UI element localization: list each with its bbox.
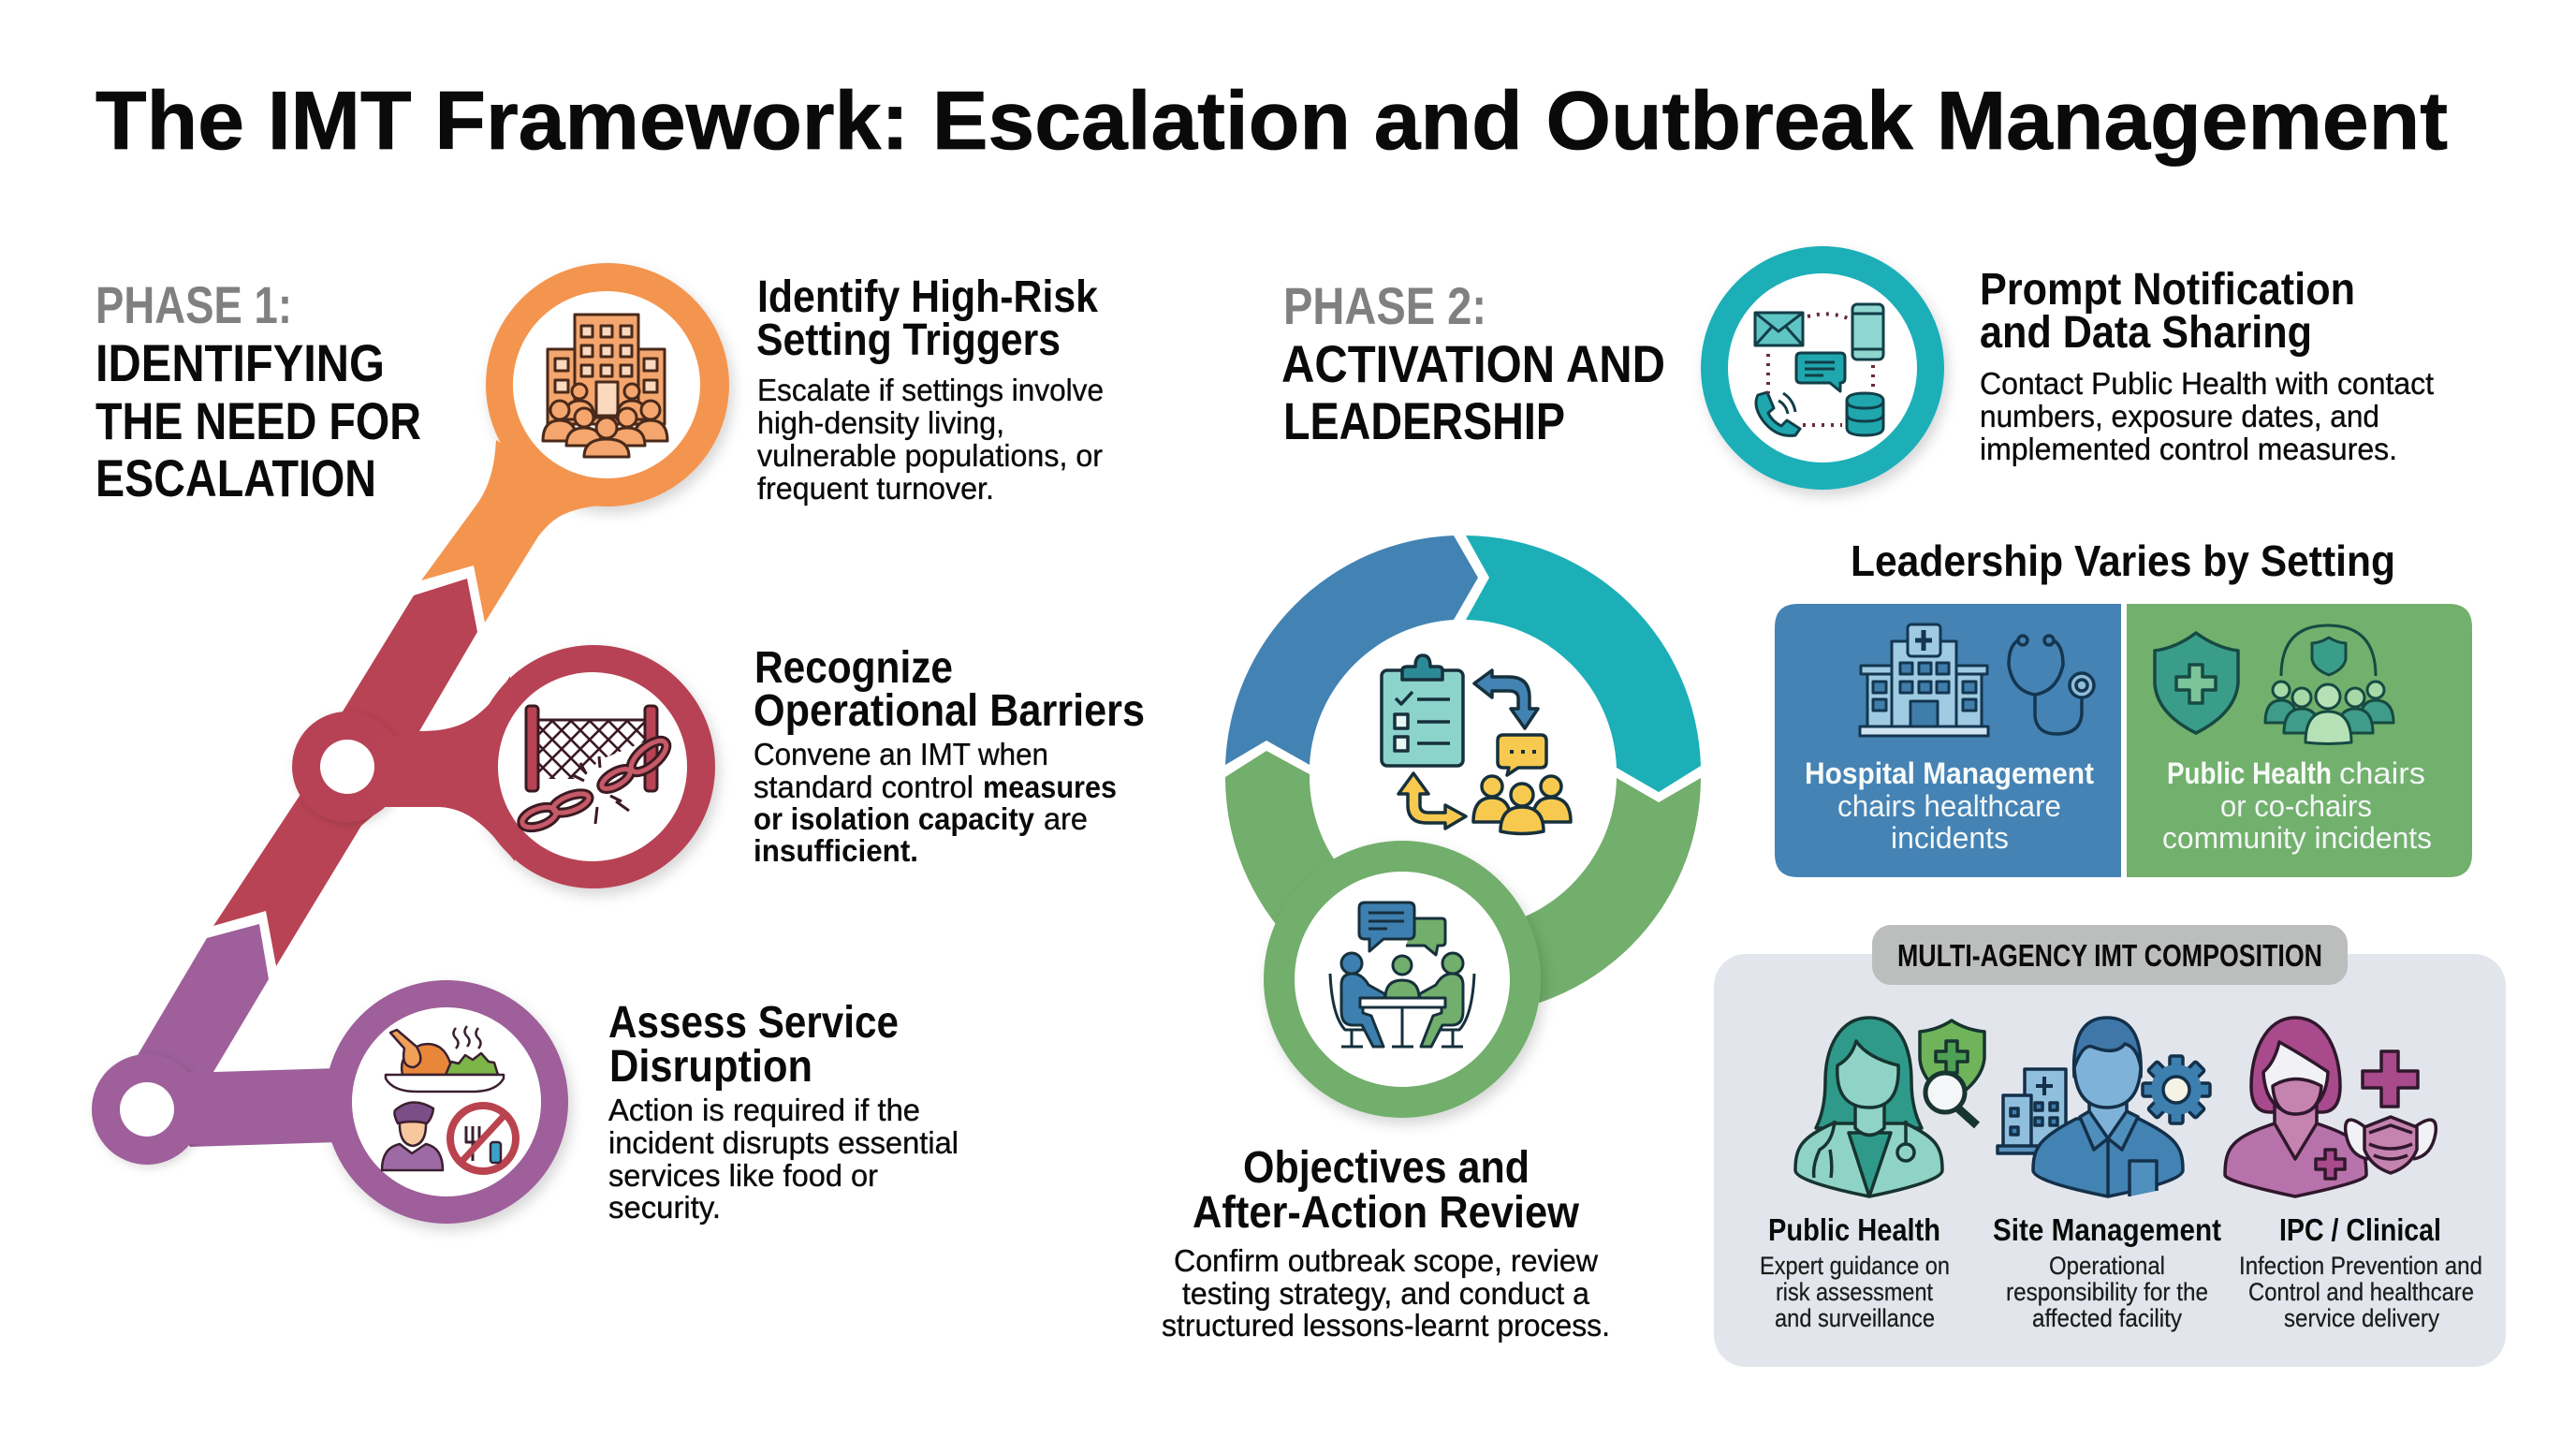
composition heading pill: MULTI-AGENCY IMT COMPOSITION	[1897, 938, 2322, 973]
text: public health chairs: Public Health	[2167, 756, 2332, 790]
text: recognize operational barriers: or isolation capacity	[754, 801, 1035, 836]
phase 2 heading: LEADERSHIP	[1283, 391, 1565, 450]
text: public health chairs: chairs	[2339, 756, 2425, 790]
text: identify high-risk setting triggers: high-density living,	[757, 405, 1004, 440]
text: site management role: Operational	[2049, 1252, 2165, 1280]
text: public health role: risk assessment	[1776, 1278, 1933, 1306]
text: objectives and after-action review: Objectives and	[1243, 1143, 1530, 1193]
phase 1 heading	[95, 275, 421, 507]
icon: team around table	[1330, 902, 1474, 1047]
text: prompt notification and data sharing: implemented control measures.	[1980, 432, 2397, 466]
text: recognize operational barriers: standard control	[754, 770, 973, 804]
text: identify high-risk setting triggers: Setting Triggers	[756, 315, 1061, 365]
icon: hospital	[1860, 624, 1988, 736]
text: public health role: and surveillance	[1775, 1304, 1935, 1332]
icon: clipboard with team and arrows	[1382, 655, 1571, 833]
text: prompt notification and data sharing: and Data Sharing	[1980, 308, 2312, 358]
text: recognize operational barriers: Operational Barriers	[754, 686, 1145, 736]
cycle diagram	[1162, 536, 1701, 1343]
cycle segment: green	[1225, 751, 1701, 1016]
text: IPC clinical role: Control and healthcare	[2248, 1278, 2474, 1306]
panel: phase 2	[1162, 246, 2506, 1367]
panel: public health leadership	[2127, 604, 2472, 877]
step connector: crimson	[213, 579, 715, 966]
icon: site manager	[1998, 1018, 2210, 1196]
text: objectives and after-action review: After-Action Review	[1193, 1188, 1580, 1238]
text: assess service disruption: services like food or	[608, 1158, 878, 1193]
text: identify high-risk setting triggers: Escalate if settings involve	[757, 373, 1104, 407]
step connector: purple	[92, 924, 568, 1224]
icon: shield with cross	[2155, 633, 2238, 733]
phase 1 heading: ESCALATION	[95, 448, 376, 507]
text: assess service disruption: security.	[608, 1190, 721, 1225]
text: site management role: Site Management	[1993, 1212, 2221, 1247]
icon: public health professional	[1795, 1018, 1984, 1196]
text: objectives and after-action review	[1162, 1143, 1610, 1343]
text: IPC clinical role	[2239, 1212, 2482, 1332]
text: site management role: affected facility	[2032, 1304, 2182, 1332]
text: hospital management: incidents	[1891, 821, 2009, 855]
leadership heading: Leadership Varies by Setting	[1851, 536, 2395, 585]
icon: food, security and no-service sign	[382, 1026, 516, 1171]
text: IPC clinical role: IPC / Clinical	[2279, 1212, 2441, 1247]
cycle segment: teal	[1466, 536, 1701, 792]
text: recognize operational barriers: insufficient.	[754, 833, 918, 868]
text: objectives and after-action review: Confirm outbreak scope, review	[1174, 1243, 1598, 1278]
objectives ring	[1264, 841, 1541, 1118]
text: assess service disruption: Action is required if the	[608, 1093, 920, 1127]
phase 2 heading: ACTIVATION AND	[1281, 334, 1665, 393]
teal notification ring	[1701, 246, 1944, 490]
text: assess service disruption: Assess Service	[608, 998, 899, 1048]
text: hospital management: chairs healthcare	[1837, 789, 2061, 823]
cycle segment: blue	[1225, 536, 1478, 765]
text: prompt notification and data sharing: Contact Public Health with contact	[1980, 366, 2434, 401]
text: site management role	[1993, 1212, 2221, 1332]
text: site management role: responsibility for the	[2006, 1278, 2208, 1306]
phase 2 heading	[1281, 276, 1665, 450]
text: public health role: Public Health	[1768, 1212, 1940, 1247]
phase 1 heading: IDENTIFYING	[95, 333, 385, 392]
panel: phase 1	[92, 263, 1145, 1225]
text: assess service disruption: Disruption	[609, 1042, 812, 1092]
text: public health role: Expert guidance on	[1760, 1252, 1950, 1280]
icon: stethoscope	[2009, 636, 2094, 734]
icon: fence and broken chain	[520, 706, 671, 831]
text: assess service disruption: incident disrupts essential	[608, 1125, 959, 1160]
text: public health role	[1760, 1212, 1950, 1332]
title: The IMT Framework: Escalation and Outbreak Management	[95, 74, 2448, 167]
text: identify high-risk setting triggers: frequent turnover.	[757, 471, 994, 506]
text: recognize operational barriers: Convene an IMT when	[754, 737, 1048, 771]
phase 1 heading: PHASE 1:	[95, 275, 292, 334]
text: objectives and after-action review: structured lessons-learnt process.	[1162, 1308, 1610, 1343]
panel: multi-agency IMT composition	[1714, 925, 2506, 1367]
step connector: orange	[421, 263, 729, 623]
text: identify high-risk setting triggers: Identify High-Risk	[757, 272, 1098, 322]
text: recognize operational barriers: Recognize	[754, 643, 953, 693]
text: IPC clinical role: Infection Prevention and	[2239, 1252, 2482, 1280]
text: prompt notification and data sharing	[1980, 265, 2434, 466]
icon: infection prevention clinician	[2225, 1018, 2436, 1196]
text: recognize operational barriers: measures	[983, 770, 1117, 804]
icon: community leadership group	[2265, 625, 2393, 743]
text: hospital management: Hospital Management	[1805, 756, 2094, 790]
text: recognize operational barriers	[754, 643, 1145, 868]
text: hospital management	[1805, 756, 2094, 855]
icon: communication channels	[1755, 304, 1883, 435]
text: public health chairs: community incidents	[2162, 821, 2432, 855]
icon: building with people	[543, 315, 667, 457]
text: public health chairs: or co-chairs	[2220, 789, 2372, 823]
text: public health chairs	[2162, 756, 2432, 855]
panel: hospital leadership	[1775, 604, 2121, 877]
phase 1 heading: THE NEED FOR	[95, 391, 421, 450]
text: prompt notification and data sharing: numbers, exposure dates, and	[1980, 399, 2379, 433]
phase 2 heading: PHASE 2:	[1283, 276, 1486, 335]
text: IPC clinical role: service delivery	[2284, 1304, 2439, 1332]
text: assess service disruption	[608, 998, 959, 1225]
text: identify high-risk setting triggers	[756, 272, 1104, 506]
text: prompt notification and data sharing: Prompt Notification	[1980, 265, 2355, 315]
composition heading pill	[1872, 925, 2348, 985]
text: objectives and after-action review: testing strategy, and conduct a	[1182, 1276, 1590, 1311]
text: recognize operational barriers: are	[1044, 801, 1088, 836]
text: identify high-risk setting triggers: vulnerable populations, or	[757, 438, 1103, 473]
